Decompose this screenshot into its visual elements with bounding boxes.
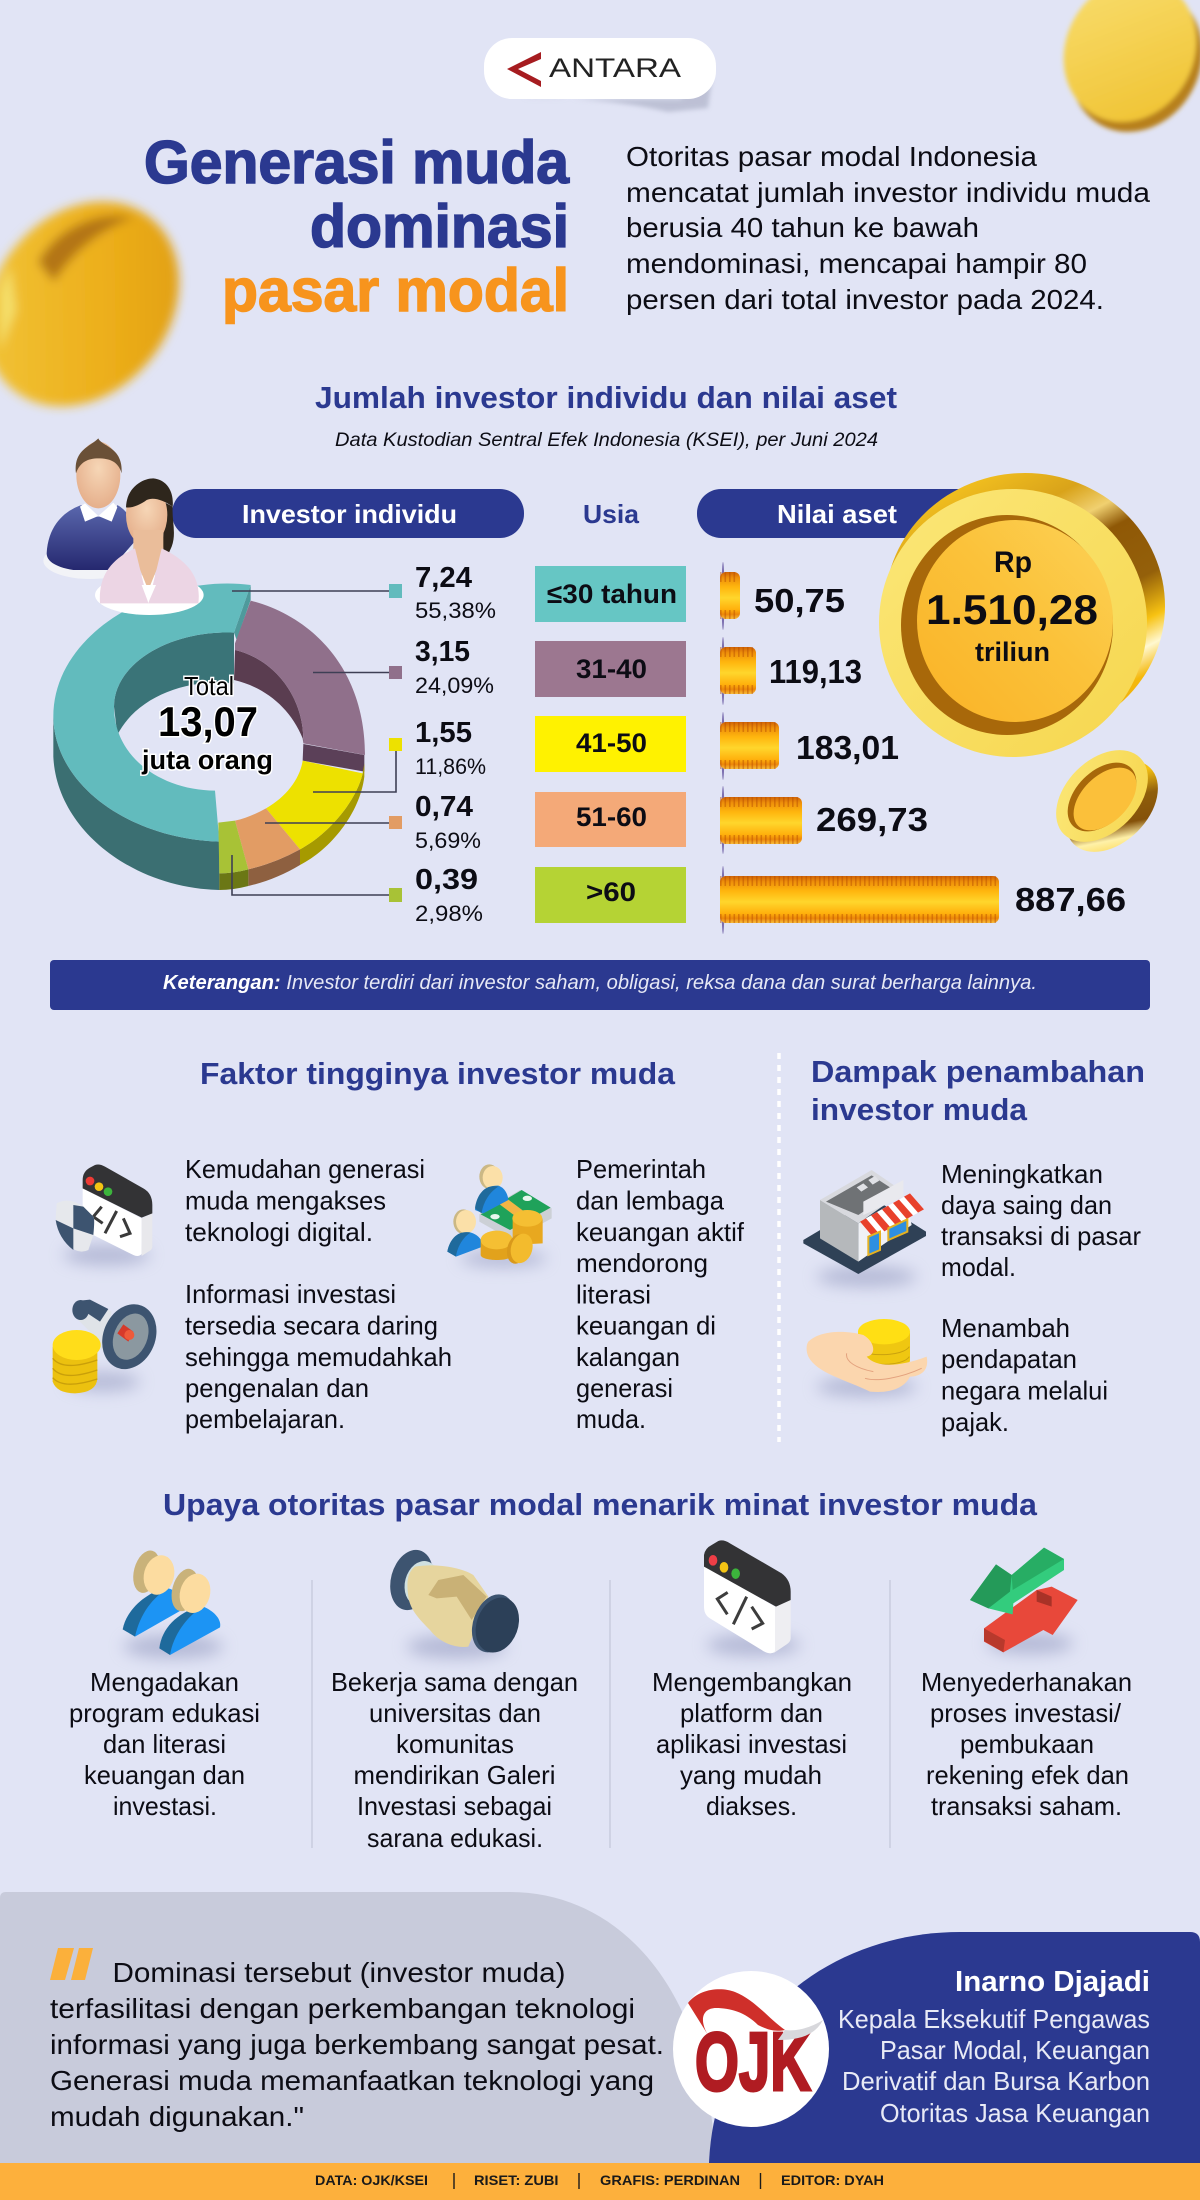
decorative blurred coin: left [0,163,219,445]
age category boxes: 31-40 [576,654,647,684]
text: mengadakan: keuangan dan [84,1760,245,1790]
text: meningkatkan: Meningkatkan [941,1159,1103,1189]
text: pemerintah: muda. [576,1404,646,1434]
quote text: terfasilitasi dengan perkembangan teknologi [50,1993,635,2024]
text: menyederhanakan: transaksi saham. [931,1791,1122,1821]
text: menyederhanakan [921,1667,1132,1821]
speaker name and title: Derivatif dan Bursa Karbon [842,2066,1150,2096]
investor values: 0,39 [415,864,478,896]
text: bekerja sama: Bekerja sama dengan [331,1667,578,1697]
text: mengadakan: program edukasi [69,1698,260,1728]
text: pemerintah: keuangan aktif [576,1217,745,1247]
speaker name and title: Pasar Modal, Keuangan [880,2035,1150,2065]
panel: speaker background [709,1932,1200,2163]
text: kemudahan [185,1154,425,1247]
section heading: jumlah investor: Jumlah investor individu dan nilai aset [315,380,897,415]
intro text [626,141,1150,315]
quote text: mudah digunakan." [50,2101,304,2132]
age category boxes: 51-60 [576,802,647,832]
text: pemerintah: literasi [576,1280,651,1310]
intro text: Otoritas pasar modal Indonesia [626,141,1037,172]
header pill: nilai aset [697,489,987,538]
text: menambah: pendapatan [941,1344,1077,1374]
text: kemudahan: Kemudahan generasi [185,1154,425,1184]
icon: two people [123,1547,223,1658]
icon: hand holding coins [807,1319,927,1397]
icon: code window large [704,1540,800,1656]
logo: ANTARA [484,38,716,112]
quote mark [50,1948,93,1980]
donut center label [141,671,273,775]
asset values: 887,66 [1015,881,1126,918]
age category boxes: >60 [586,877,636,907]
text: bekerja sama: Investasi sebagai [357,1791,552,1821]
text: menyederhanakan: pembukaan [960,1729,1094,1759]
quote text: informasi yang juga berkembang sangat pesat. [50,2029,664,2060]
investor values: 1,55 [415,717,472,749]
asset values: 50,75 [754,582,845,619]
age category boxes [535,566,686,923]
header: usia: Usia [583,499,640,529]
text: bekerja sama: universitas dan [369,1698,541,1728]
text: mengembangkan: yang mudah [680,1760,822,1790]
small coin [1038,732,1176,870]
section heading: jumlah investor [315,380,897,451]
panel: quote background [0,1892,715,2163]
text: meningkatkan [941,1159,1141,1282]
investor values [415,562,496,926]
donut center label: 13,07 [158,698,258,745]
text: informasi: Informasi investasi [185,1279,396,1309]
text: kemudahan: teknologi digital. [185,1217,373,1247]
footer credits: GRAFIS: PERDINAN [600,2172,740,2188]
text: meningkatkan: transaksi di pasar [941,1221,1141,1251]
donut chart [53,583,365,890]
quote text: Generasi muda memanfaatkan teknologi yang [50,2065,654,2096]
text: mengembangkan: Mengembangkan [652,1667,852,1697]
text: informasi: pengenalan dan [185,1373,369,1403]
text: kemudahan: muda mengakses [185,1186,386,1216]
footer credits: EDITOR: DYAH [781,2172,884,2188]
icon: people with money and coins [447,1164,552,1267]
investor values: 0,74 [415,791,473,823]
text: mengadakan: Mengadakan [90,1667,239,1697]
decorative blurred coin: top right [1039,0,1200,155]
footer credits: DATA: OJK/KSEI [315,2172,428,2188]
asset values [754,582,1126,918]
icon: megaphone and coins [53,1296,166,1393]
text: mengadakan: investasi. [113,1791,217,1821]
leader lines and legend squares [232,584,402,902]
investor values: 3,15 [415,636,470,668]
footer credits [315,2172,884,2189]
text: meningkatkan: daya saing dan [941,1190,1112,1220]
big coin: total asset: triliun [975,637,1050,667]
donut center label: juta orang [141,745,273,775]
text: pemerintah [576,1154,745,1434]
investor values: 11,86% [415,754,486,779]
text: bekerja sama [331,1667,578,1853]
text: menambah [941,1313,1108,1437]
speaker name and title: Inarno Djajadi [955,1966,1150,1998]
text: mengembangkan: diakses. [706,1791,797,1821]
intro text: mendominasi, mencapai hampir 80 [626,248,1087,279]
icon: shop [803,1170,926,1287]
text: informasi: pembelajaran. [185,1404,345,1434]
icon: exchange arrows [970,1548,1078,1654]
asset values: 269,73 [816,801,928,838]
header pill: investor individu: Investor individu [242,499,457,529]
quote text [50,1957,664,2132]
text: mengembangkan: aplikasi investasi [656,1729,847,1759]
footer band [0,2163,1200,2200]
note bar: keterangan [50,960,1150,1010]
investor values: 2,98% [415,901,483,926]
text: meningkatkan: modal. [941,1252,1016,1282]
section heading: jumlah investor: Data Kustodian Sentral Efek Indonesia (KSEI), per Juni 2024 [335,430,878,451]
header pill: nilai aset: Nilai aset [777,499,897,529]
text: pemerintah: keuangan di [576,1310,716,1340]
big coin: total asset [879,473,1165,757]
text: bekerja sama: sarana edukasi. [367,1823,543,1853]
heading: dampak [811,1054,1145,1127]
note bar: keterangan: Keterangan: Investor terdiri dari investor saham, obligasi, reksa dana dan surat berharga lainnya. [163,972,1037,994]
asset values: 183,01 [796,729,899,766]
text: mengembangkan [652,1667,852,1821]
age category boxes: 41-50 [576,728,647,758]
investor values: 24,09% [415,673,494,698]
header pill: investor individu [172,489,524,538]
quote text: Dominasi tersebut (investor muda) [112,1957,566,1988]
text: pemerintah: generasi [576,1373,673,1403]
text: menambah: pajak. [941,1407,1009,1437]
investor values: 7,24 [415,562,472,594]
donut center label: Total [184,671,234,701]
intro text: persen dari total investor pada 2024. [626,284,1104,315]
heading: dampak: investor muda [811,1092,1028,1127]
text: menambah: negara melalui [941,1376,1108,1406]
title: dominasi [310,193,569,260]
intro text: berusia 40 tahun ke bawah [626,212,979,243]
text: menyederhanakan: proses investasi/ [930,1698,1122,1728]
big coin: total asset: 1.510,28 [926,586,1098,633]
title: Generasi muda [144,129,570,196]
asset values: 119,13 [769,653,862,690]
text: pemerintah: kalangan [576,1342,680,1372]
text: menyederhanakan: Menyederhanakan [921,1667,1132,1697]
investor values: 5,69% [415,828,481,853]
text: mengadakan: dan literasi [103,1729,226,1759]
investor values: 55,38% [415,598,496,623]
intro text: mencatat jumlah investor individu muda [626,177,1150,208]
text: informasi: tersedia secara daring [185,1310,438,1340]
heading: upaya: Upaya otoritas pasar modal menarik minat investor muda [163,1487,1038,1522]
heading: dampak: Dampak penambahan [811,1054,1145,1089]
text: pemerintah: dan lembaga [576,1186,725,1216]
text: informasi [185,1279,452,1434]
text: bekerja sama: mendirikan Galeri [354,1760,556,1790]
icon: code window and shield [56,1164,152,1265]
speaker name and title: Kepala Eksekutif Pengawas [838,2004,1150,2034]
text: bekerja sama: komunitas [396,1729,514,1759]
text: pemerintah: Pemerintah [576,1154,706,1184]
icon: handshake [384,1545,526,1659]
speaker name and title [838,1966,1150,2128]
logo: OJK [673,1971,829,2127]
logo: ANTARA: ANTARA [549,53,681,83]
text: pemerintah: mendorong [576,1248,708,1278]
title: pasar modal [222,257,569,324]
text: informasi: sehingga memudahkah [185,1342,452,1372]
text: mengadakan [69,1667,260,1821]
text: menyederhanakan: rekening efek dan [926,1760,1129,1790]
coin stack bars: nilai aset [720,562,999,934]
speaker name and title: Otoritas Jasa Keuangan [880,2098,1150,2128]
icon: man and woman investors [43,438,204,615]
age category boxes: ≤30 tahun [547,579,677,609]
title [144,129,570,324]
logo: OJK: OJK [695,2015,811,2108]
footer credits: RISET: ZUBI [474,2172,558,2188]
text: mengembangkan: platform dan [680,1698,823,1728]
heading: faktor: Faktor tingginya investor muda [200,1056,676,1091]
text: menambah: Menambah [941,1313,1070,1343]
big coin: total asset: Rp [994,546,1032,579]
